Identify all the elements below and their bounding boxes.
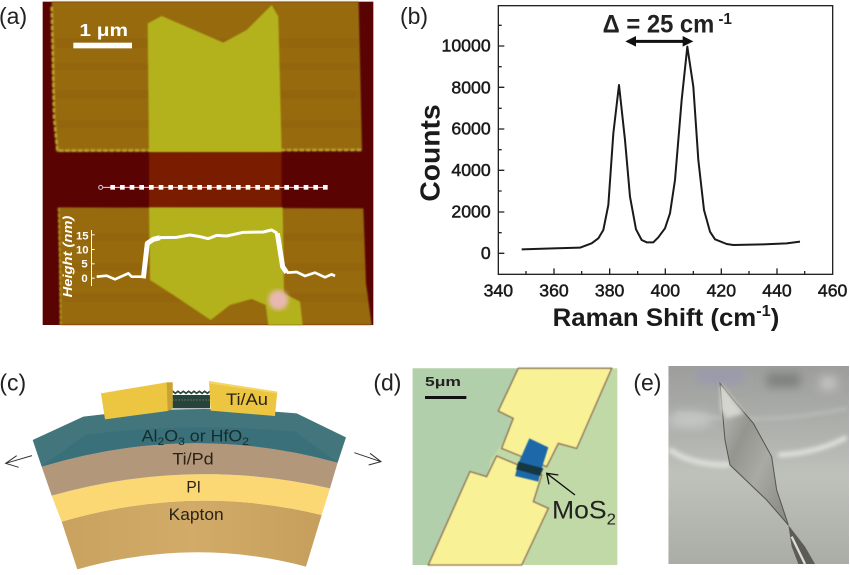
profile axis: 15: [76, 230, 89, 242]
panel b: Raman spectrum chart: [400, 3, 848, 332]
layer labels: Ti/Pd: [172, 449, 214, 468]
photo background: [667, 366, 849, 564]
MoS2 pointer arrow: [547, 473, 575, 495]
flake over bottom electrode: [149, 207, 303, 325]
x tick labels: 440: [762, 281, 792, 301]
y tick labels: 6000: [451, 119, 491, 139]
micrograph background: [413, 368, 617, 565]
Kapton layer: [62, 501, 322, 569]
x axis title: -1: [756, 303, 771, 320]
scale bar: 1 μm: [79, 20, 128, 40]
panel a: AFM height image: [0, 2, 373, 325]
right gold contact: [209, 381, 277, 416]
profile axis title: Height (nm): [61, 216, 75, 297]
layer labels: Al: [142, 427, 156, 446]
x axis title: ): [771, 304, 779, 332]
panel label b: (b): [400, 3, 428, 29]
upper electrode: [498, 368, 612, 467]
x tick labels: 400: [651, 281, 680, 301]
y tick labels: 0: [481, 243, 491, 263]
particle highlight: [268, 290, 288, 310]
bottom electrode pad: [58, 207, 372, 325]
PI layer: [52, 474, 330, 522]
MoS2 label: MoS: [552, 496, 604, 524]
x axis title: Raman Shift (cm: [553, 304, 753, 332]
layer labels: O: [164, 427, 178, 446]
profile axis: 0: [81, 273, 88, 285]
x tick labels: 420: [707, 281, 736, 301]
lower electrode: [428, 456, 548, 565]
panel c: device layer schematic: [0, 370, 381, 569]
oxide layer: [33, 409, 346, 467]
y tick labels: 10000: [442, 36, 491, 56]
peak separation annotation: [603, 11, 732, 47]
x tick labels: [484, 281, 848, 301]
panel label c: (c): [0, 370, 26, 396]
MoS2 label: 2: [607, 511, 616, 528]
top electrode pad: [52, 2, 362, 152]
height trace: [97, 273, 142, 279]
layer labels: 3: [178, 436, 185, 448]
height profile inset: [61, 216, 335, 297]
layer labels: or HfO: [185, 427, 242, 446]
x tick labels: 460: [818, 281, 848, 301]
panel d: optical micrograph: [373, 368, 617, 565]
profile axis: 5: [81, 259, 88, 271]
AFM image background: [43, 2, 373, 325]
panel label e: (e): [633, 370, 661, 396]
y axis title: Counts: [414, 104, 445, 202]
scale bar d: 5μm: [425, 374, 461, 389]
MoS2 channel: [168, 391, 213, 408]
Ti/Pd layer: [42, 443, 338, 496]
y tick labels: 4000: [451, 160, 491, 180]
layer labels: [142, 390, 268, 524]
y tick labels: [442, 36, 491, 263]
y tick labels: 8000: [451, 77, 491, 97]
flake over top electrode: [148, 5, 282, 152]
layer labels: PI: [186, 478, 201, 497]
x tick labels: 340: [484, 281, 513, 301]
scale bar d: [425, 374, 466, 399]
profile axis: 10: [76, 244, 89, 256]
line-scan markers: [99, 185, 328, 190]
x tick labels: 360: [539, 281, 569, 301]
flexible film: [720, 383, 788, 525]
MoS2 flake: [515, 438, 548, 482]
peak separation annotation: -1: [718, 11, 732, 28]
profile axis: [76, 230, 95, 286]
layer labels: 2: [242, 436, 249, 448]
y tick labels: 2000: [451, 202, 491, 222]
left strain arrow: [6, 456, 32, 467]
peak separation annotation: Δ = 25 cm: [603, 12, 714, 39]
layer labels: Ti/Au: [226, 390, 268, 409]
flake over channel: [149, 152, 282, 207]
scale bar: [73, 20, 132, 48]
layer labels: Kapton: [169, 505, 224, 524]
plot frame and ticks: [498, 6, 833, 274]
x tick labels: 380: [595, 281, 625, 301]
layer labels: 2: [157, 436, 164, 448]
panel e: flexible device photograph: [633, 366, 849, 564]
tweezers: [788, 525, 815, 564]
panel label d: (d): [373, 370, 401, 396]
left gold contact: [101, 382, 173, 419]
right strain arrow: [354, 453, 381, 465]
spectrum curve: [522, 47, 800, 249]
